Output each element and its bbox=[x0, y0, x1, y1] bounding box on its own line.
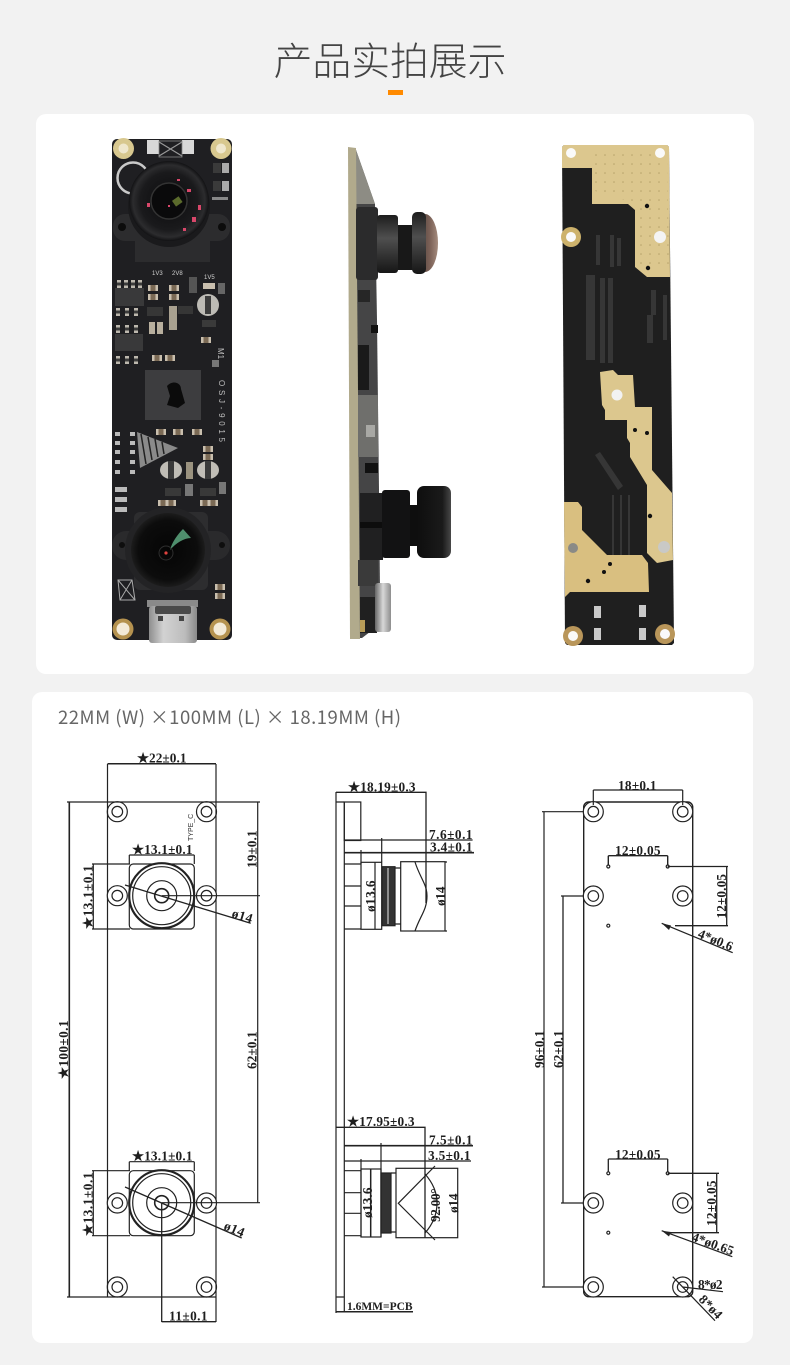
back view labels: 12±0.05 bbox=[714, 874, 729, 918]
back board bbox=[562, 145, 674, 645]
side view labels: 92.00° bbox=[428, 1188, 443, 1222]
drawing: front view bbox=[67, 764, 260, 1322]
top lens bbox=[128, 161, 210, 247]
small parts near USB bbox=[118, 580, 225, 607]
front view labels: ★22±0.1 bbox=[137, 750, 187, 766]
dimension lines bbox=[108, 763, 216, 765]
title accent bar bbox=[388, 90, 403, 95]
upper circuit components: 1V5 bbox=[204, 275, 215, 281]
side view labels: ★18.19±0.3 bbox=[348, 780, 416, 794]
photo: camera module front bbox=[112, 138, 232, 643]
photo: camera module side bbox=[348, 147, 451, 639]
panel: product photos bbox=[36, 114, 754, 674]
front view labels: 11±0.1 bbox=[169, 1308, 208, 1324]
side PCB edge bbox=[348, 147, 360, 639]
front view labels: ★13.1±0.1 bbox=[132, 1148, 193, 1164]
front view labels: ★13.1±0.1 bbox=[80, 865, 96, 929]
drawing: back view bbox=[542, 790, 733, 1321]
top lens bbox=[107, 863, 216, 929]
front board bbox=[112, 139, 232, 640]
side view labels: 7.5±0.1 bbox=[429, 1132, 473, 1148]
panel: dimension drawings bbox=[32, 692, 753, 1343]
side view labels: ø13.6 bbox=[363, 880, 378, 912]
back view labels: 12±0.05 bbox=[704, 1180, 719, 1226]
copper bottom left bbox=[564, 502, 649, 597]
side view labels: ø14 bbox=[446, 1193, 461, 1213]
drawing: side view bbox=[336, 792, 474, 1313]
bottom side module bbox=[336, 1127, 473, 1312]
side view labels: 1.6MM=PCB bbox=[347, 1301, 413, 1313]
holes bbox=[561, 148, 675, 646]
side top lens bbox=[356, 207, 438, 280]
traces bbox=[586, 235, 667, 555]
board marking: M1 bbox=[216, 348, 225, 360]
back dimension lines bbox=[593, 790, 683, 805]
photo: camera module back bbox=[561, 145, 675, 646]
front view labels: ø14 bbox=[222, 1218, 247, 1240]
USB-C connector bbox=[149, 606, 197, 643]
back board outline bbox=[584, 802, 693, 1297]
back view labels: 4*ø0.65 bbox=[690, 1229, 736, 1258]
front view labels: TYPE_C bbox=[188, 814, 195, 841]
PCB bbox=[336, 792, 344, 1313]
side surface parts bbox=[358, 290, 378, 586]
silkscreen logo bbox=[118, 162, 148, 194]
top connector silkscreen bbox=[147, 140, 194, 157]
back view labels: 96±0.1 bbox=[532, 1030, 547, 1068]
board outline bbox=[67, 764, 260, 1322]
back view labels: 4*ø0.6 bbox=[696, 926, 736, 954]
connector pads bbox=[115, 432, 135, 512]
side bottom lens bbox=[360, 486, 451, 560]
front view labels bbox=[56, 750, 260, 1324]
upper circuit components bbox=[115, 271, 225, 367]
front view labels: ★100±0.1 bbox=[56, 1020, 71, 1079]
silver pads bbox=[594, 605, 646, 640]
main chip bbox=[145, 370, 201, 420]
bottom lens bbox=[107, 1170, 216, 1236]
upper circuit components: 1V3 bbox=[152, 271, 163, 277]
back view labels: 18±0.1 bbox=[618, 778, 657, 793]
front view labels: ★13.1±0.1 bbox=[132, 842, 193, 857]
front view labels: 19±0.1 bbox=[244, 830, 260, 868]
side USB connector bbox=[360, 583, 391, 633]
side view labels bbox=[347, 780, 473, 1313]
top side module bbox=[336, 792, 474, 931]
side board face bbox=[356, 150, 380, 638]
back view labels: 12±0.05 bbox=[615, 843, 661, 858]
side view labels: 7.6±0.1 bbox=[429, 827, 473, 842]
back view labels: 12±0.05 bbox=[615, 1147, 661, 1162]
front view labels: ★13.1±0.1 bbox=[80, 1172, 96, 1236]
back view labels: 62±0.1 bbox=[551, 1030, 566, 1068]
mounting pads bbox=[112, 138, 232, 640]
bottom lens holder bbox=[112, 512, 230, 590]
front view labels: 62±0.1 bbox=[244, 1031, 260, 1069]
side view labels: ø13.6 bbox=[360, 1187, 375, 1218]
pin holes bbox=[607, 865, 669, 1234]
title: 产品实拍展示 bbox=[274, 41, 506, 84]
size caption: 22MM (W) ×100MM (L) × 18.19MM (H) bbox=[58, 704, 401, 730]
lower circuit components bbox=[156, 429, 226, 506]
side view labels: 3.4±0.1 bbox=[430, 840, 473, 854]
mounting holes bbox=[107, 802, 216, 1297]
side view labels: ★17.95±0.3 bbox=[347, 1114, 415, 1129]
front view labels: ø14 bbox=[230, 906, 255, 926]
photo: camera module front: OSJ-9015 bbox=[217, 380, 226, 443]
bottom lens bbox=[125, 507, 211, 593]
back view labels: 8*ø2 bbox=[698, 1277, 723, 1292]
side view labels: 3.5±0.1 bbox=[428, 1148, 471, 1163]
vias bbox=[586, 204, 652, 583]
copper top bbox=[562, 145, 670, 277]
back view labels: 8*ø4 bbox=[696, 1292, 726, 1322]
side view labels: ø14 bbox=[433, 886, 448, 906]
right side parts bbox=[212, 163, 229, 200]
copper centre bbox=[600, 370, 673, 563]
upper circuit components: 2V8 bbox=[172, 271, 183, 277]
back view labels bbox=[532, 778, 736, 1322]
top lens holder bbox=[113, 214, 230, 262]
antenna mesh bbox=[137, 432, 178, 468]
back holes bbox=[583, 802, 693, 1297]
back leader arrowheads bbox=[662, 923, 671, 1236]
